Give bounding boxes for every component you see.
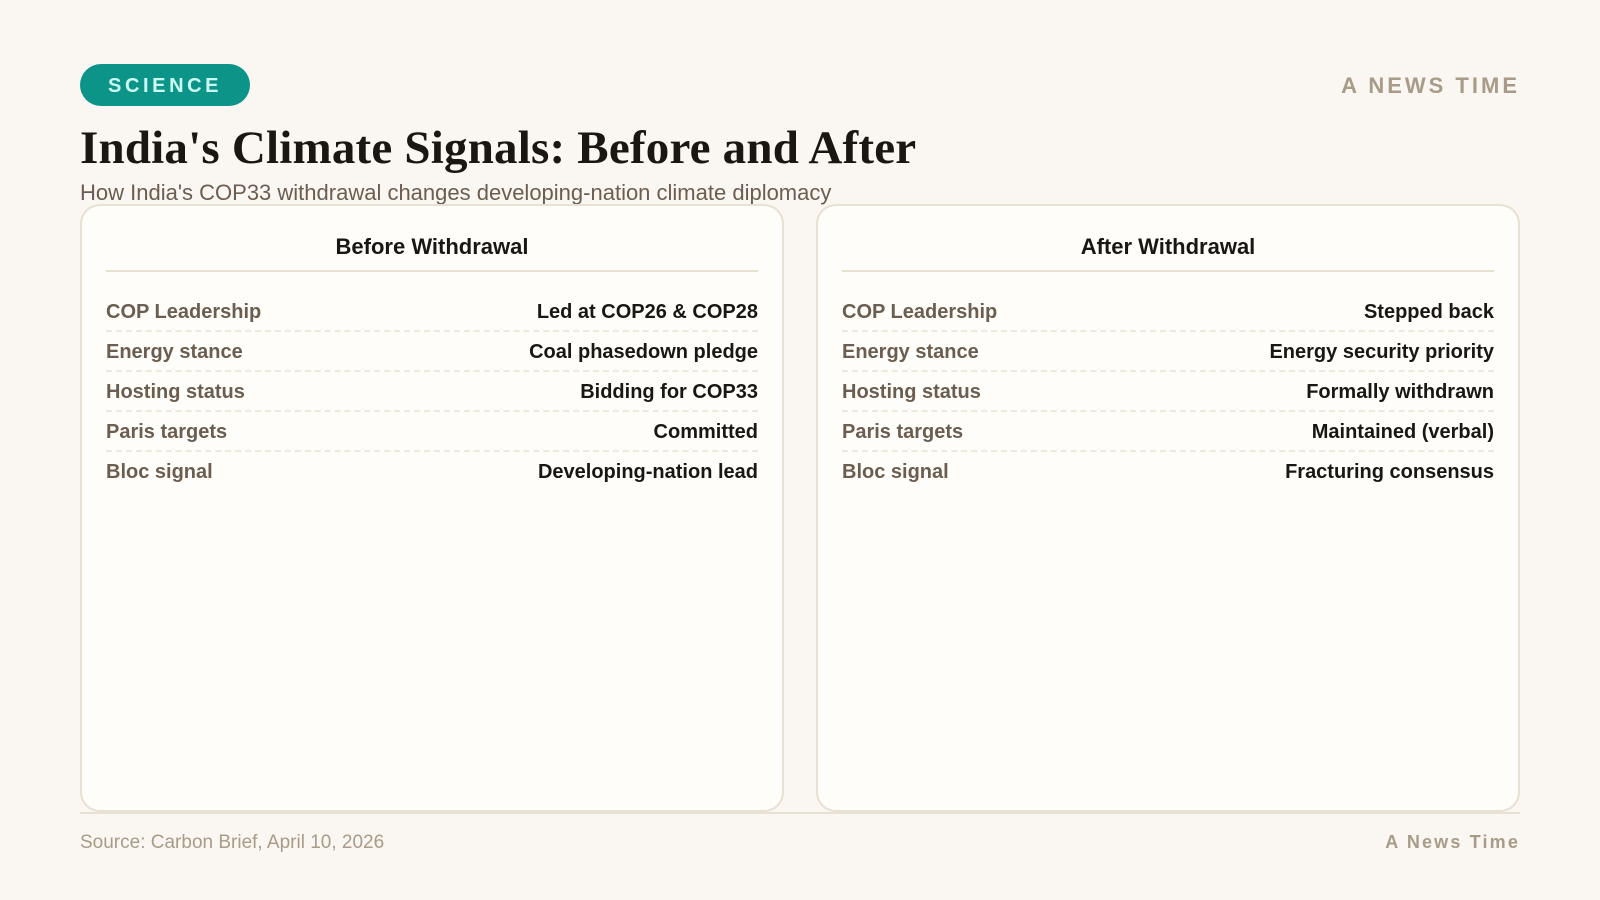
category pill [80, 64, 250, 106]
row: Bloc signal: Bloc signal [106, 461, 213, 483]
source note: Source: Carbon Brief, April 10, 2026 [80, 832, 384, 853]
row: Energy stance: Energy stance [106, 341, 243, 363]
row: Paris targets: Committed [654, 421, 758, 443]
brand top right: A NEWS TIME [1341, 73, 1520, 98]
panel heading: before [106, 206, 758, 272]
row: Bloc signal: Fracturing consensus [1285, 461, 1494, 483]
row: Paris targets: Maintained (verbal) [1312, 421, 1494, 443]
row: Paris targets [842, 412, 1494, 452]
row: Energy stance: Coal phasedown pledge [529, 341, 758, 363]
row: Bloc signal: Bloc signal [842, 461, 949, 483]
row: Hosting status: Hosting status [842, 381, 981, 403]
row: Paris targets [106, 412, 758, 452]
row: Energy stance: Energy stance [842, 341, 979, 363]
row: COP Leadership: COP Leadership [842, 301, 997, 323]
row: Energy stance: Energy security priority [1269, 341, 1494, 363]
row: Bloc signal: Developing-nation lead [538, 461, 758, 483]
row: COP Leadership [842, 292, 1494, 332]
row: Paris targets: Paris targets [106, 421, 227, 443]
row: COP Leadership: Led at COP26 & COP28 [537, 301, 758, 323]
row: Bloc signal [842, 461, 1494, 483]
row: COP Leadership: COP Leadership [106, 301, 261, 323]
panel: after withdrawal [816, 204, 1520, 812]
row: Energy stance [106, 332, 758, 372]
panel heading: after [842, 206, 1494, 272]
category pill: SCIENCE [108, 75, 222, 97]
row: Hosting status: Formally withdrawn [1306, 381, 1494, 403]
row: Hosting status [842, 372, 1494, 412]
row: COP Leadership [106, 292, 758, 332]
row: Bloc signal [106, 461, 758, 483]
panel heading: after: After Withdrawal [1081, 234, 1255, 259]
panel: before withdrawal [80, 204, 784, 812]
row: Energy stance [842, 332, 1494, 372]
footer brand: A News Time [1385, 832, 1520, 852]
row: COP Leadership: Stepped back [1364, 301, 1494, 323]
row: Paris targets: Paris targets [842, 421, 963, 443]
subtitle: How India's COP33 withdrawal changes developing-nation climate diplomacy [80, 180, 831, 205]
row: Hosting status: Bidding for COP33 [580, 381, 758, 403]
panel heading: before: Before Withdrawal [336, 234, 528, 259]
footer rule [80, 812, 1520, 814]
title: India's Climate Signals: Before and After [80, 122, 916, 174]
row: Hosting status: Hosting status [106, 381, 245, 403]
row: Hosting status [106, 372, 758, 412]
